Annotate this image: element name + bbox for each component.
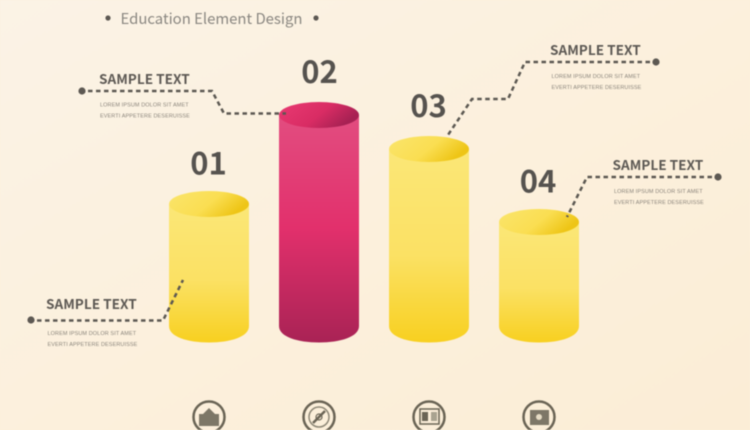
icon: monitor [524,402,554,430]
callout 03: EVERTI APPETERE DESERUISSE [552,85,642,91]
cylinder 02 [279,102,359,342]
icon: school [194,402,224,430]
cylinder 04 [499,209,579,342]
callout 04: SAMPLE TEXT [612,154,704,174]
callout 03: LOREM IPSUM DOLOR SIT AMET [552,74,641,80]
callout 01: EVERTI APPETERE DESERUISSE [48,342,138,348]
callout 04: LOREM IPSUM DOLOR SIT AMET [614,189,703,195]
callout 01: LOREM IPSUM DOLOR SIT AMET [48,331,137,337]
callout 03 [448,39,660,135]
number 01: 01 [190,138,227,184]
callout 01 [27,280,183,348]
callout 02: LOREM IPSUM DOLOR SIT AMET [100,102,189,108]
callout 04 [567,154,722,217]
callout 04: EVERTI APPETERE DESERUISSE [614,200,704,206]
title: Education Element Design [120,8,302,29]
callout 02: SAMPLE TEXT [99,68,190,88]
icon: disc [304,402,334,430]
callout 02 [78,68,286,120]
callout 03: SAMPLE TEXT [550,39,641,59]
number 04: 04 [520,156,556,202]
callout 02: EVERTI APPETERE DESERUISSE [100,114,190,120]
cylinder 03 [389,136,469,342]
cylinder 01 [169,191,249,342]
number 02: 02 [301,47,338,92]
icon: id card [414,402,444,430]
number 03: 03 [410,81,447,126]
callout 01: SAMPLE TEXT [46,293,137,313]
